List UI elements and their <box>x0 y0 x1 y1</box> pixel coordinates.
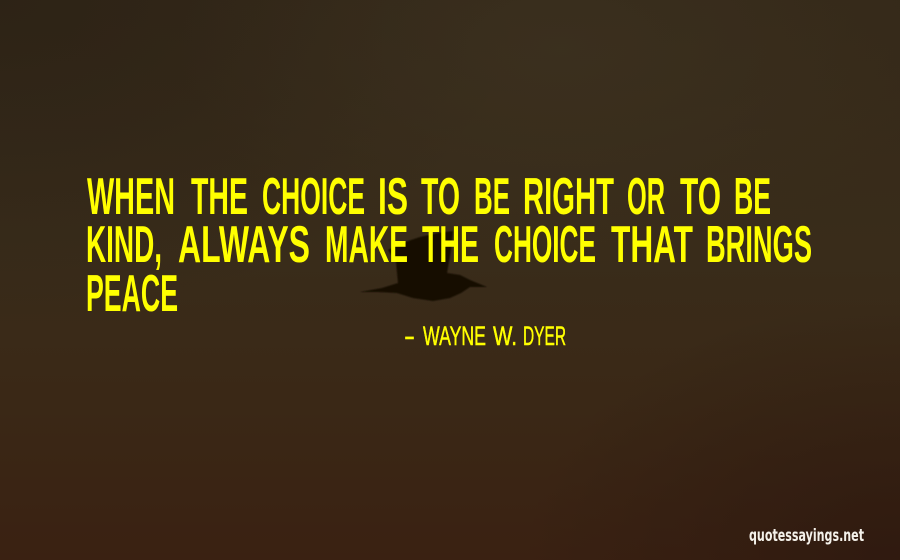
quote line 2: MAKE <box>325 216 408 274</box>
quote line 1 <box>87 168 771 226</box>
quote line 1: TO <box>680 168 721 226</box>
quote line 1: BE <box>474 168 510 226</box>
quote line 2: THAT <box>611 216 693 274</box>
quote line 2 <box>86 216 812 274</box>
quote line 1: TO <box>421 168 460 226</box>
quote line 1: THE <box>191 168 248 226</box>
quote line 3: PEACE <box>86 265 178 323</box>
quote line 1: IS <box>378 168 408 226</box>
attribution: WAYNE <box>423 321 486 351</box>
icon: bird silhouette <box>360 231 487 301</box>
attribution <box>404 321 566 351</box>
quote line 2: KIND, <box>86 216 162 274</box>
quote line 1: BE <box>734 168 771 226</box>
quote line 1: CHOICE <box>262 168 365 226</box>
quote line 2: THE <box>422 216 479 274</box>
quote line 1: OR <box>627 168 665 226</box>
quote line 1: RIGHT <box>523 168 614 226</box>
attribution: DYER <box>523 321 566 351</box>
quote text <box>86 168 812 323</box>
attribution: W. <box>493 321 517 351</box>
quote line 2: ALWAYS <box>178 216 310 274</box>
quote line 2: CHOICE <box>494 216 596 274</box>
attribution: - <box>404 321 415 351</box>
quote line 1: WHEN <box>87 168 175 226</box>
